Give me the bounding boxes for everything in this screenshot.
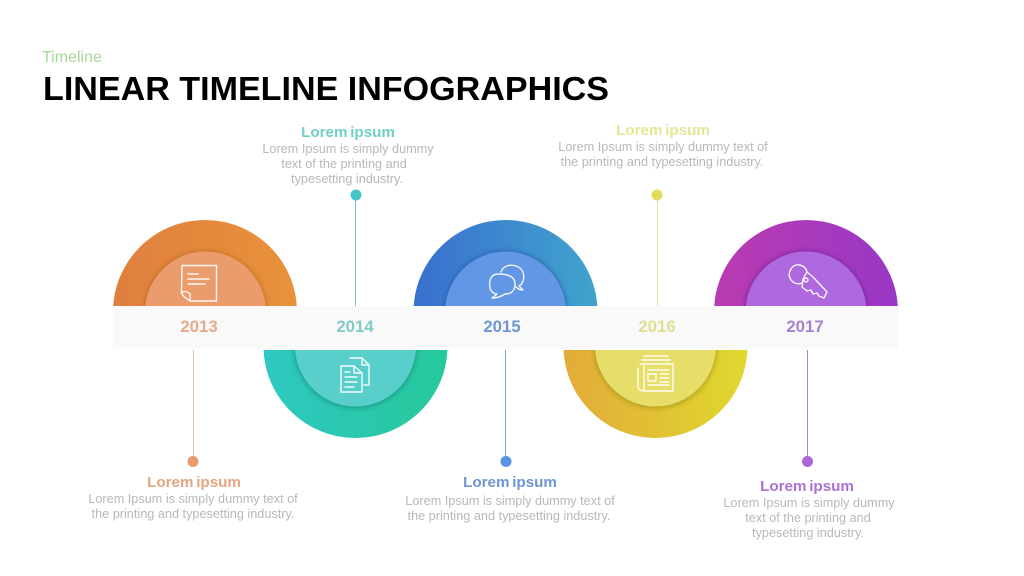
connector 2015 xyxy=(500,350,512,467)
text block 2014: text of the printing and xyxy=(281,157,407,171)
connector 2017 xyxy=(802,350,813,467)
semicircle 2013 xyxy=(113,220,297,306)
semicircle 2016 xyxy=(564,350,748,438)
title: LINEAR TIMELINE INFOGRAPHICS xyxy=(43,71,609,108)
text block 2017: Lorem ipsum xyxy=(760,478,854,495)
text block 2013: Lorem Ipsum is simply dummy text of xyxy=(88,492,298,506)
year 2014: 2014 xyxy=(336,317,374,336)
text block 2016: Lorem Ipsum is simply dummy text of xyxy=(558,140,768,154)
icon: key xyxy=(789,265,827,298)
icon: note xyxy=(182,266,216,301)
connector 2016 xyxy=(652,190,662,306)
text block 2015 xyxy=(405,474,615,523)
icon: newspaper xyxy=(638,356,673,391)
semicircle 2014 xyxy=(264,350,448,438)
text block 2017: text of the printing and xyxy=(745,511,871,525)
text block 2015: Lorem ipsum xyxy=(463,474,557,491)
icon: chat bubbles xyxy=(490,265,524,298)
year 2016: 2016 xyxy=(638,317,676,336)
connector 2013 xyxy=(188,350,198,467)
year 2015: 2015 xyxy=(483,317,521,336)
text block 2014: typesetting industry. xyxy=(291,172,403,186)
text block 2015: Lorem Ipsum is simply dummy text of xyxy=(405,494,615,508)
year 2013: 2013 xyxy=(180,317,218,336)
text block 2017: Lorem Ipsum is simply dummy xyxy=(723,496,895,510)
text block 2017: typesetting industry. xyxy=(752,526,864,540)
text block 2013: the printing and typesetting industry. xyxy=(92,507,294,521)
year 2017: 2017 xyxy=(786,317,824,336)
semicircle 2017 xyxy=(714,220,898,306)
text block 2016: the printing and typesetting industry. xyxy=(561,155,763,169)
icon: documents xyxy=(341,358,369,392)
connector 2014 xyxy=(350,190,362,306)
text block 2016 xyxy=(558,122,768,169)
text block 2013: Lorem ipsum xyxy=(147,474,241,491)
text block 2017 xyxy=(723,478,895,540)
text block 2016: Lorem ipsum xyxy=(616,122,710,139)
timeline bar xyxy=(113,306,898,349)
text block 2015: the printing and typesetting industry. xyxy=(408,509,610,523)
text block 2013 xyxy=(88,474,298,521)
text block 2014 xyxy=(262,124,434,186)
text block 2014: Lorem Ipsum is simply dummy xyxy=(262,142,434,156)
text block 2014: Lorem ipsum xyxy=(301,124,395,141)
semicircle 2015 xyxy=(414,220,598,306)
section label: Timeline xyxy=(42,49,102,66)
